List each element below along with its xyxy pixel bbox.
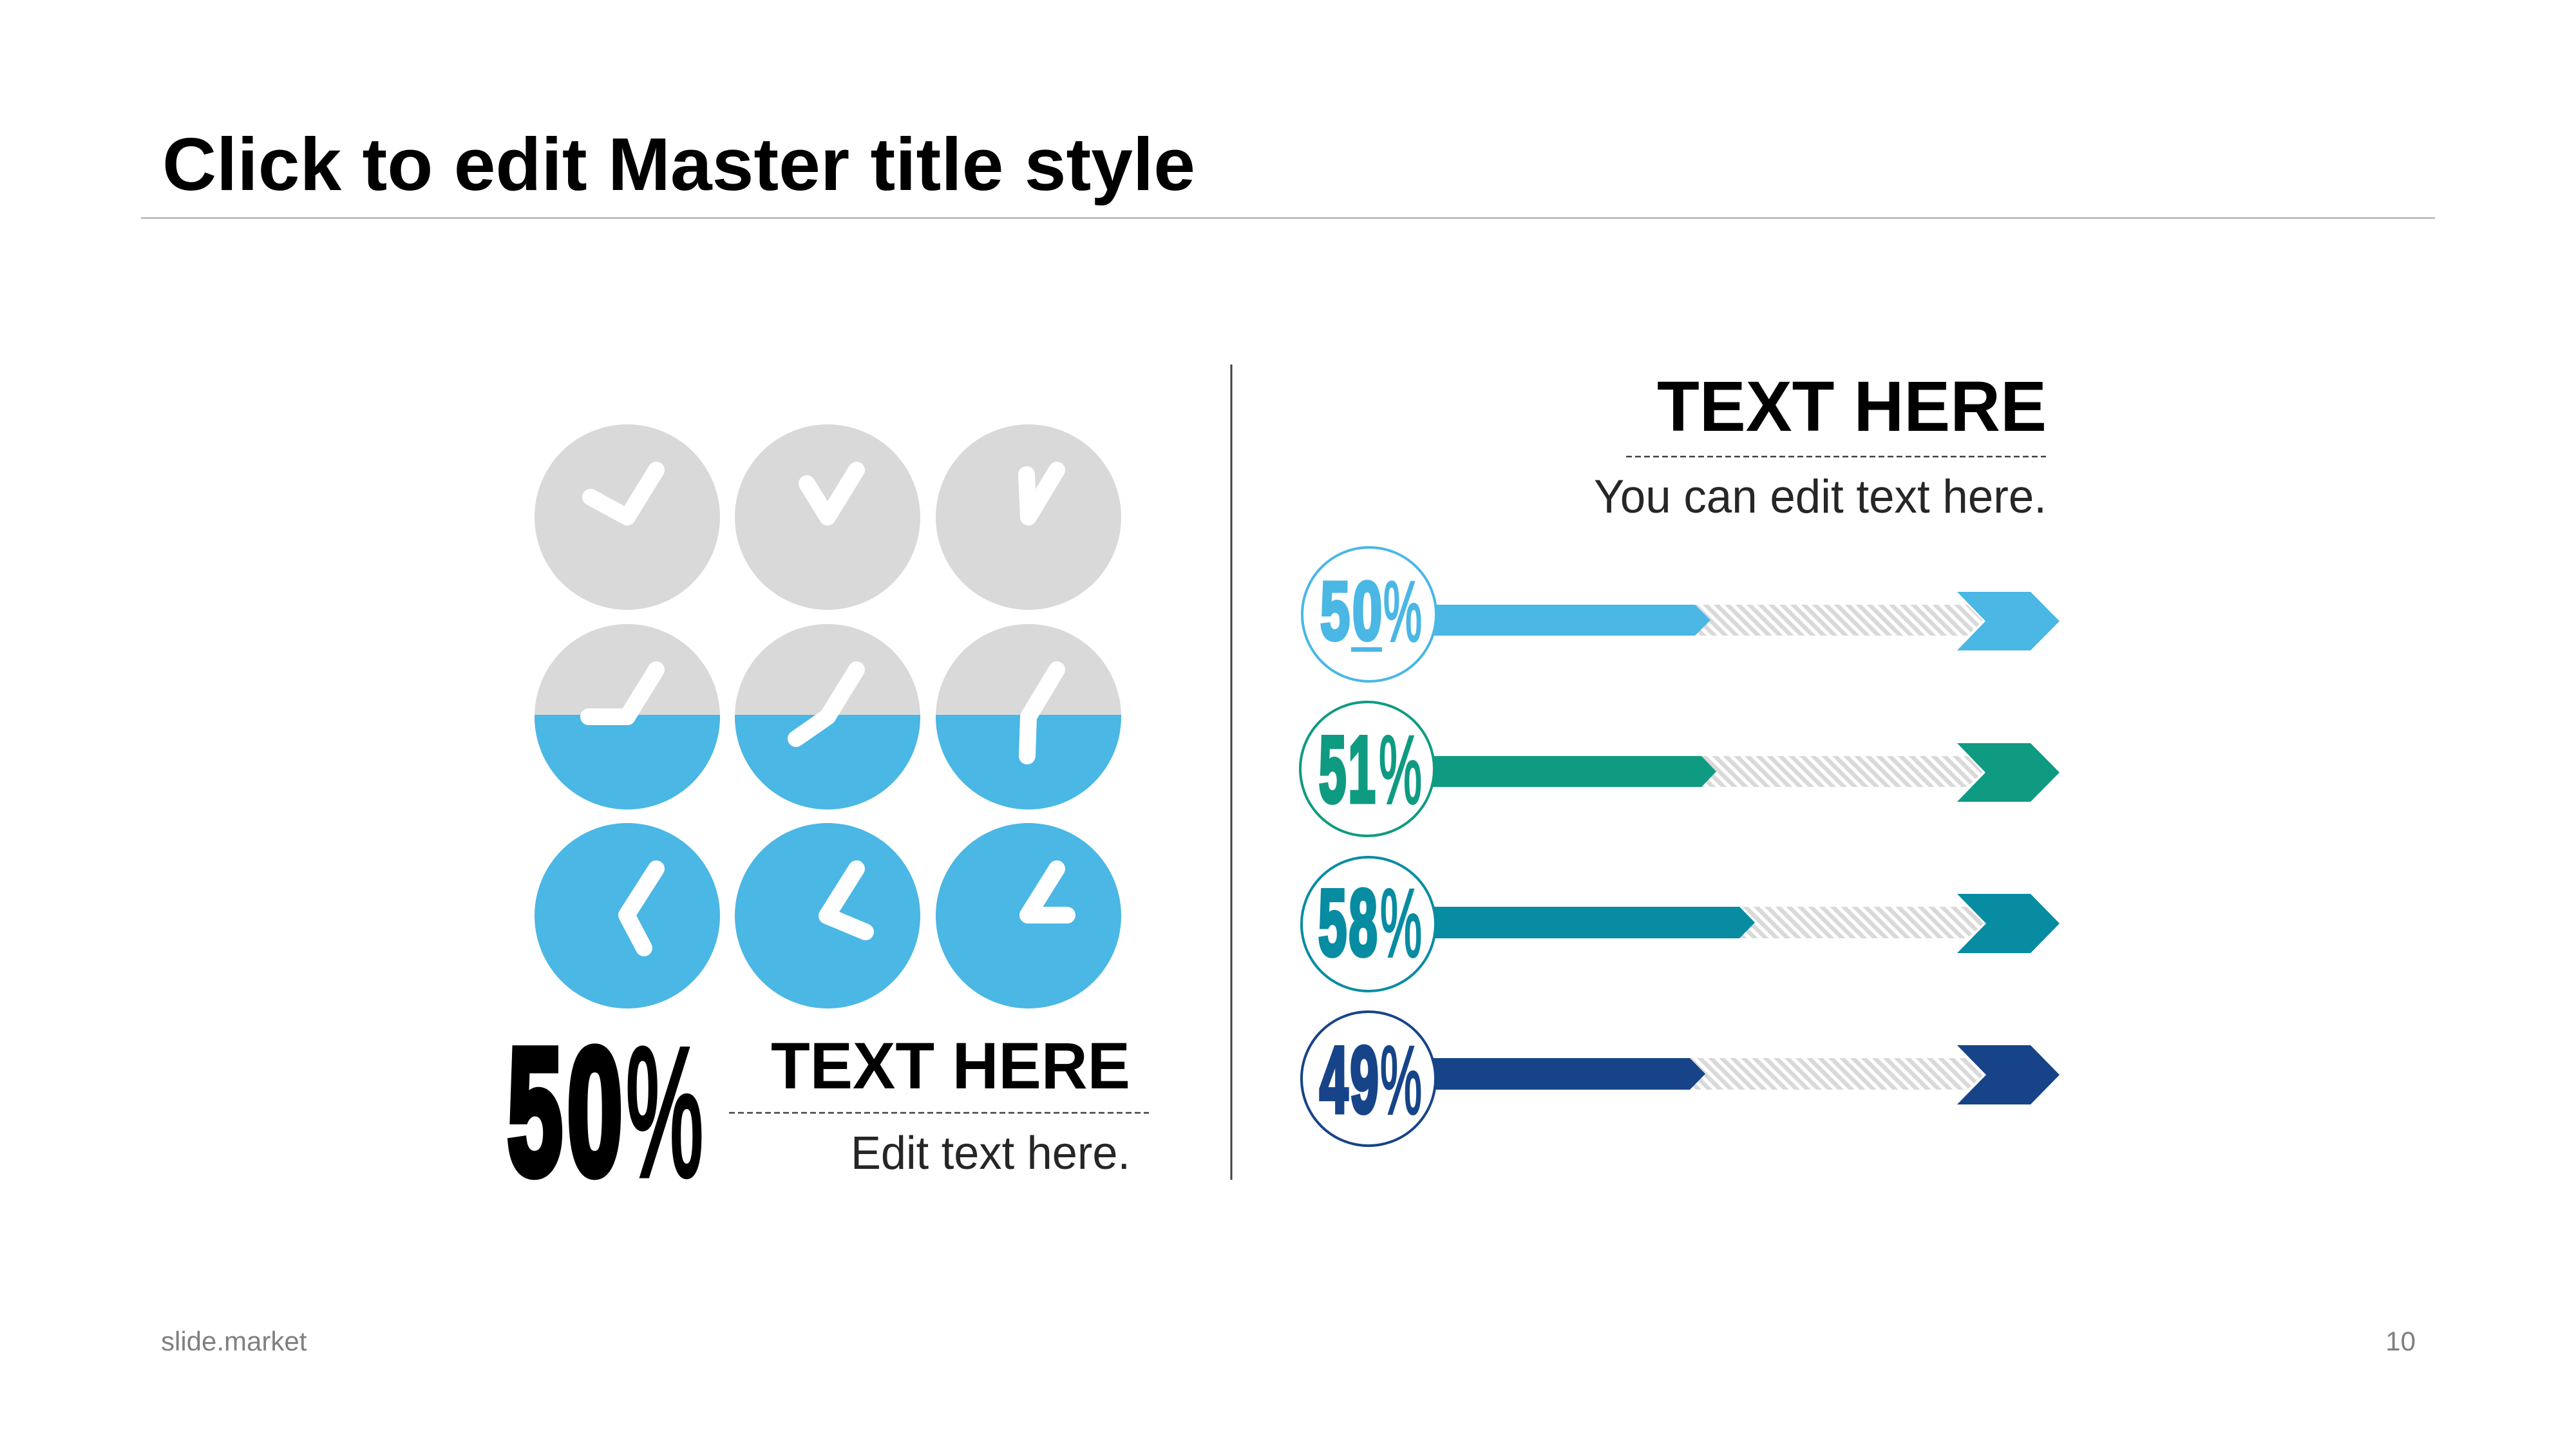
page number: 10 — [2385, 1326, 2416, 1356]
big percentage: 50 — [507, 1011, 627, 1211]
progress row: 49%: % — [1380, 1026, 1422, 1134]
progress row: 50% — [1302, 547, 2060, 681]
progress row: 50%: 50 — [1320, 565, 1385, 658]
left text block — [729, 1029, 1149, 1179]
progress row: 58% — [1302, 857, 2060, 991]
progress row: 51%: 51 — [1319, 717, 1378, 822]
clock: blue 9 — [936, 823, 1121, 1009]
clock: gray 1 — [535, 424, 720, 610]
clock: gray 3 — [936, 424, 1121, 610]
progress row: 51% — [1300, 702, 2060, 836]
footer source: slide.market — [161, 1326, 307, 1356]
progress row: 49%: 49 — [1320, 1027, 1381, 1132]
progress row: 58%: % — [1380, 869, 1422, 977]
clock: half 6 — [936, 624, 1121, 810]
clock: blue 7 — [535, 823, 720, 1009]
progress row: 51%: % — [1379, 715, 1422, 824]
text: % — [626, 1010, 703, 1215]
clock: half 4 — [535, 624, 720, 810]
progress row: 58%: 58 — [1318, 870, 1379, 975]
left heading: TEXT HERE — [771, 1029, 1130, 1103]
right caption: You can edit text here. — [1594, 471, 2047, 523]
clock: gray 2 — [735, 424, 920, 610]
left caption: Edit text here. — [851, 1128, 1130, 1179]
right text block — [1594, 367, 2047, 523]
progress row: 49% — [1302, 1012, 2060, 1146]
clock: blue 8 — [735, 823, 920, 1009]
clock grid — [535, 424, 1121, 1009]
clock: half 5 — [735, 624, 920, 810]
title: Click to edit Master title style — [162, 122, 1195, 206]
right heading: TEXT HERE — [1657, 367, 2047, 446]
progress row: 50%: % — [1383, 564, 1422, 659]
